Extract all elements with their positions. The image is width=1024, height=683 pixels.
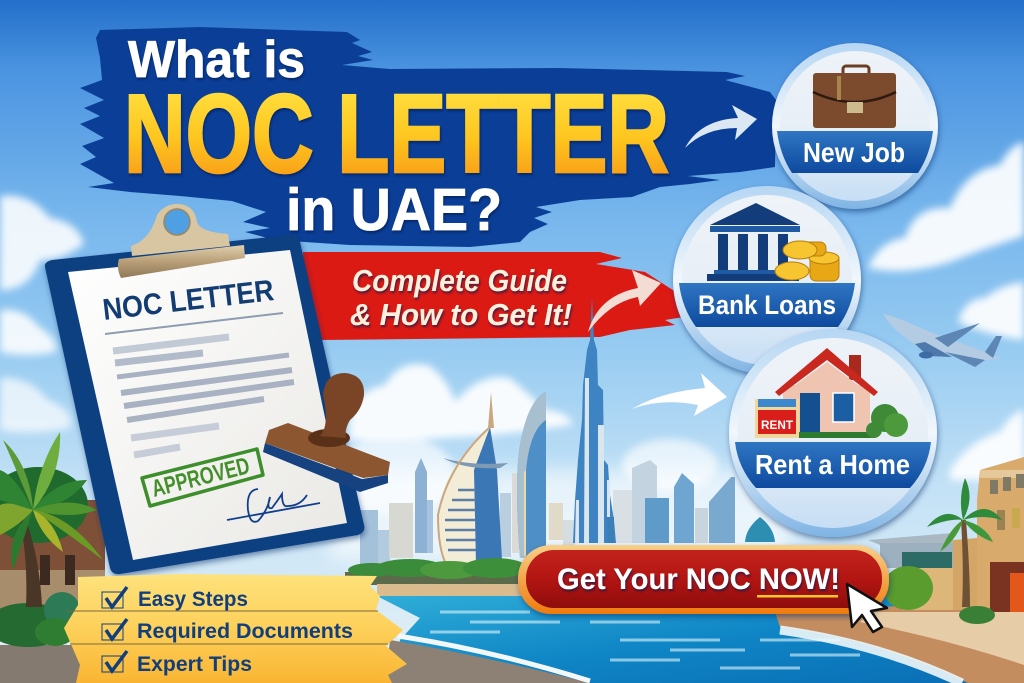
palm trees strip xyxy=(345,558,527,585)
approved stamp xyxy=(142,449,263,506)
sail tower xyxy=(517,367,546,558)
left palm xyxy=(0,432,103,607)
heading: What is NOC LETTER in UAE? xyxy=(124,31,669,243)
metal clip xyxy=(118,204,245,278)
clouds xyxy=(0,142,1024,560)
green shrubs xyxy=(883,566,933,610)
icon: coins xyxy=(775,241,839,281)
arrow to Bank Loans xyxy=(588,270,661,332)
arrow to Rent a Home xyxy=(632,373,727,416)
checklist item: Expert Tips: Expert Tips xyxy=(137,653,252,676)
label band xyxy=(777,131,933,173)
badge: New Job xyxy=(772,43,938,209)
checklist banner xyxy=(64,574,407,683)
approved stamp: APPROVED xyxy=(149,452,252,503)
right clouds xyxy=(868,142,1024,480)
heading line: What is: What is xyxy=(128,31,305,89)
ground xyxy=(0,645,90,683)
label: Rent a Home xyxy=(755,449,910,480)
paper sheet xyxy=(68,250,347,560)
subtitle text: & How to Get It! xyxy=(350,297,572,332)
heading line: in UAE?: in UAE? xyxy=(286,177,502,243)
document title: NOC LETTER xyxy=(101,274,276,327)
left building xyxy=(0,500,105,610)
subtitle text: Complete Guide xyxy=(352,263,567,298)
heading line: NOC LETTER: NOC LETTER xyxy=(124,72,669,196)
sea and beaches xyxy=(375,584,1024,683)
title brush stroke xyxy=(80,27,776,247)
label band xyxy=(735,442,931,488)
soft horizon haze xyxy=(330,470,790,560)
button label: Get Your NOC NOW! xyxy=(557,563,840,596)
label: Bank Loans xyxy=(698,290,836,320)
left building, foliage and palm xyxy=(0,432,105,683)
subtitle text xyxy=(350,263,572,332)
potted plant xyxy=(959,606,995,624)
surf right xyxy=(780,630,962,683)
sea xyxy=(375,595,1024,683)
rubber stamp xyxy=(263,373,390,492)
central clouds xyxy=(335,364,718,515)
label band xyxy=(679,283,855,327)
Burj Khalifa xyxy=(573,297,616,543)
clipboard board xyxy=(45,235,364,574)
right house, building and palm xyxy=(868,457,1024,624)
distant buildings xyxy=(360,458,775,565)
modern house xyxy=(868,533,953,545)
wet sand and surf left xyxy=(385,640,590,683)
checklist item: Easy Steps: Easy Steps xyxy=(138,588,248,611)
icon: mouse cursor xyxy=(847,584,887,632)
icon: bank xyxy=(707,203,800,281)
call-to-action button xyxy=(518,545,889,614)
airplane xyxy=(883,314,1002,367)
badge: Bank Loans xyxy=(673,186,861,374)
document rule and text lines xyxy=(105,313,294,455)
label: New Job xyxy=(803,137,905,168)
icon: rent sign xyxy=(755,399,799,438)
signature xyxy=(227,489,320,522)
left clouds xyxy=(0,195,84,433)
right palm xyxy=(927,478,1002,607)
clipboard xyxy=(45,204,390,574)
left foliage xyxy=(0,592,80,647)
checklist item: Expert Tips xyxy=(102,651,252,676)
checklist item: Required Documents: Required Documents xyxy=(137,620,353,643)
beach sand strip xyxy=(377,584,525,596)
icon: rent sign: RENT xyxy=(761,418,794,432)
Burj Al Arab xyxy=(438,392,508,566)
right beach xyxy=(775,600,1024,683)
skyline xyxy=(360,297,775,566)
red subtitle banner xyxy=(303,252,690,340)
tan building xyxy=(953,538,978,610)
icon: house xyxy=(775,348,908,438)
badge: Rent a Home xyxy=(729,329,937,537)
icon: briefcase xyxy=(813,66,896,128)
arrow to New Job xyxy=(685,105,757,148)
